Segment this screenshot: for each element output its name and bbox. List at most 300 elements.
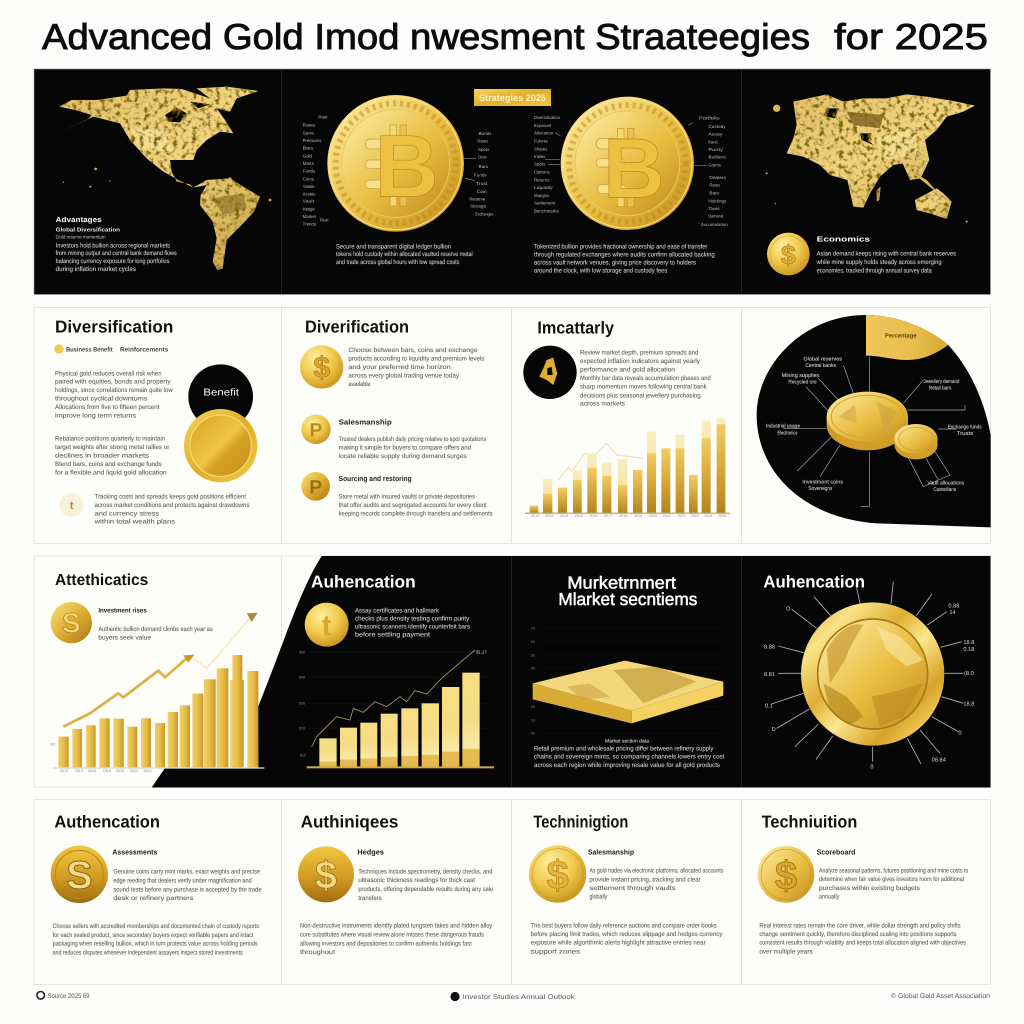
text block: caption: across each region while improving resale value for all gold products (534, 762, 720, 769)
text block: support zones (531, 948, 580, 955)
text block: ultrasonic thickness readings for thick cast (358, 877, 475, 884)
panel: Techniuition (758, 812, 968, 955)
text block: coin caption: Secure and transparent digital ledger bullion (336, 243, 451, 250)
diagram labels: Jewellery demand (923, 379, 959, 384)
text block: before placing limit trades, which reduces slippage and hedges currency (531, 931, 722, 938)
labels: coin left: Diversification (534, 115, 560, 120)
map: island specks (63, 168, 271, 201)
spoke labels: 08.84 (932, 756, 946, 763)
labels: coin right (688, 116, 728, 227)
bar chart: 2020 (116, 769, 124, 773)
labels: coin left: Bars (303, 146, 314, 151)
icon: coin: $ (315, 853, 337, 897)
bar chart: $0 (51, 742, 55, 746)
labels: coin right: Spots (478, 147, 489, 152)
spoke labels: 0 (958, 729, 961, 736)
icon: coin three (301, 472, 330, 501)
coin: small (894, 424, 938, 459)
labels: coin right: Bars (709, 190, 720, 195)
labels: coin right: Dealers (709, 175, 726, 180)
diagram labels: Electronics (777, 430, 797, 436)
labels: coin left: Coins (303, 176, 314, 181)
bar chart: $10 (300, 753, 306, 757)
icon: coin two: P (310, 419, 322, 441)
text block: coin caption (534, 243, 715, 274)
bar chart: 2024 (704, 514, 712, 518)
spoke labels: 8.81 (764, 671, 775, 677)
bar chart: 2018 (619, 514, 627, 518)
spoke labels: 18.8 (963, 639, 974, 645)
labels: coin left: Spots (534, 162, 546, 167)
labels: coin left: Exposure (534, 123, 551, 128)
labels: coin left: Vault (303, 199, 314, 204)
icon: pale round badge: t (70, 499, 74, 512)
spoke labels: 0.18 (963, 646, 974, 652)
labels: coin right: Coin (477, 189, 487, 194)
text block: coin one: Choose between bars, coins and exchange (348, 347, 478, 354)
heading: Authencation (54, 812, 160, 832)
spoke labels: 0.1 (765, 702, 773, 709)
text block: for each sealed product, since secondary buyers expect verifiable papers and intact (53, 932, 254, 939)
labels: coin right: Storage (470, 204, 486, 209)
icon: coin one: $ (313, 351, 330, 384)
diagram labels (766, 356, 982, 492)
text block: coin two: locate reliable supply during demand surges (339, 453, 467, 460)
text block (98, 607, 213, 641)
text block: Advantages: Investors hold bullion across regional markets (56, 242, 170, 249)
labels: coin left: Rate (318, 115, 327, 120)
labels: coin left: Benchmarks (534, 208, 559, 213)
spoke labels: (8.0 (964, 670, 974, 676)
text block: throughout (300, 949, 335, 956)
diagram labels: Global reserves (803, 356, 842, 362)
text block: paragraph three: and currency stress (95, 510, 159, 517)
text block: packaging when reselling bullion, which in turn protects value across holding periods (53, 940, 258, 947)
bar chart: $30 (299, 702, 305, 706)
text block: transfers (358, 895, 382, 902)
text block: Techniques include spectrometry, density checks, and (358, 868, 492, 875)
bar chart: 2022 (677, 514, 685, 518)
text block: paragraph three: within total wealth plans (94, 518, 175, 525)
text block: Advantages: Advantages (56, 215, 102, 224)
text block: Real interest rates remain the core driver, while dollar strength and policy shifts (759, 922, 961, 929)
labels: coin left: Market (303, 214, 316, 219)
text block: Economics (816, 235, 956, 274)
badge: Benefit circle: Benefit (203, 387, 239, 398)
coin: bitcoin: B (603, 121, 665, 216)
row 1: dark map and coin panels (34, 69, 990, 294)
heading: Mlarket secntiems (558, 590, 697, 609)
labels: coin left: Gold (303, 153, 312, 158)
bar chart: 2023 (691, 514, 699, 518)
chart grid: 00 (531, 732, 535, 736)
bar chart: 2018 (103, 769, 111, 773)
text block: coin two: making it simple for buyers to compare offers and (339, 444, 471, 451)
icon: coin (298, 846, 354, 902)
bar chart: 2014 (75, 769, 83, 773)
text block: description: across markets (580, 400, 625, 407)
icon: coin two (301, 415, 331, 444)
text block (300, 848, 493, 956)
text block: exposure while algorithmic alerts highlight attractive entries near (531, 939, 706, 946)
text block: coin one: and your preferred time horizon (348, 364, 451, 371)
heading: Attethicatics (55, 571, 148, 589)
labels: coin left: Shares (534, 146, 547, 151)
black rounded shape (757, 315, 991, 527)
bar chart: 2015 (575, 514, 583, 518)
chart grid: 40 (531, 667, 535, 671)
labels: coin left: Funds (303, 169, 316, 174)
text block: Assessments (112, 848, 157, 856)
text block: coin three: that offer audits and segregated accounts for every client (339, 502, 487, 509)
text block: allowing investors and depositories to confirm authentic holdings fast (300, 940, 472, 947)
icon: coin (51, 846, 108, 903)
text block: Salesmanship (588, 848, 634, 856)
text block: annually (819, 893, 839, 900)
footer: left source (37, 992, 90, 1000)
coin: bitcoin: B (375, 117, 439, 215)
labels: coin left: Rates (303, 123, 316, 128)
bar chart: 2012 (60, 769, 68, 773)
text block: globally (589, 893, 607, 900)
text block: caption: Market section data (605, 738, 649, 744)
labels: coin left: Assets (303, 192, 315, 197)
diagram labels: Investment coins (802, 479, 843, 485)
icon: coin one (300, 345, 343, 389)
text block: Hedges (357, 848, 384, 856)
chart grid: 50 (531, 653, 535, 657)
labels: coin left: Yields (303, 184, 315, 189)
icon: coin (758, 846, 814, 903)
text block: and reduces disputes whenever independent assayers inspect stored investments (53, 949, 243, 956)
text block: Advantages: Gold reserve momentum (56, 234, 106, 240)
chart grid (531, 627, 723, 736)
panel: Auhencation big coin (763, 572, 974, 770)
text block: description: decisions plus seasonal jewellery purchasing (580, 392, 701, 399)
icon: coin: S (62, 607, 81, 639)
text block: Economics: while mine supply holds steady across emerging (816, 259, 942, 266)
panel: Diversification with benefit coin (54, 317, 257, 525)
heading: Auhencation (311, 572, 416, 592)
text block: coin one: across every global trading venue today (348, 372, 459, 379)
labels: coin left: Liquidity (534, 185, 553, 190)
text block: paragraph two: target weights after strong metal rallies or (55, 444, 170, 451)
coin: large (827, 392, 908, 450)
footer: center source (450, 992, 575, 1001)
heading: Auhencation (763, 572, 865, 592)
text block: Assay certificates and hallmark (355, 607, 439, 614)
text block: settlement through vaults (589, 885, 676, 892)
panel: coin diagram on black shape (757, 315, 991, 527)
diagram labels: Sovereigns (808, 486, 832, 491)
footer: center source: Investor Studies Annual Outlook (463, 994, 575, 1001)
labels: coin right: Portfolio (699, 116, 720, 121)
text block: purchases within existing budgets (819, 885, 920, 892)
text block: caption: Retail premium and wholesale pricing differ between refinery supply (534, 745, 713, 752)
spoke labels: 18.8 (963, 701, 974, 707)
gold wedge with label: Percentage (885, 332, 917, 339)
tag: gold label: Strategies 2025 (479, 93, 547, 104)
text block: paragraph three: Tracking costs and spreads keeps gold positions efficient (95, 493, 246, 500)
labels: coin left: Options (534, 170, 550, 175)
text block: coin caption: Tokenized bullion provides fractional ownership and ease of transfer (534, 243, 708, 250)
panel: gold bitcoin coin two (534, 94, 975, 275)
labels: coin right: Rates (477, 139, 488, 144)
icon: coin: $ (775, 853, 797, 898)
icon: coin: t (322, 609, 332, 642)
text block (355, 607, 470, 638)
text block: paragraph one: improve long term returns (55, 412, 136, 419)
text block: paragraph two: Rebalance positions quarterly to maintain (55, 435, 165, 442)
bar chart: 2013 (545, 514, 553, 518)
chart grid: 60 (531, 640, 535, 644)
subheading with bullet: Business Benefit (66, 346, 113, 353)
leader lines (783, 357, 965, 507)
text block: description: performance and gold allocation (580, 366, 675, 373)
text block: description: Review market depth, premium spreads and (580, 349, 698, 356)
bar chart: 2016 (88, 769, 96, 773)
text block: Advantages: during inflation market cycles (56, 266, 136, 273)
text block: caption: chains and sovereign mints, so comparing channels lowers entry cost (534, 753, 725, 760)
bar chart: 2012 (531, 514, 539, 518)
icon: pale round badge (60, 493, 84, 517)
text block: over multiple years (759, 948, 813, 955)
icon: coin (529, 845, 586, 903)
text block: change sentiment quickly, therefore disciplined scaling into positions supports (759, 931, 957, 938)
diagram labels: Vault allocations (927, 480, 964, 486)
icon: plain gold coin (184, 409, 257, 482)
text block: checks plus density testing confirm purity (355, 615, 469, 622)
heading: Diverification (305, 317, 409, 336)
spoke labels: 8.88 (764, 643, 775, 650)
text block: paragraph one (55, 370, 173, 419)
icon: small coin (767, 233, 810, 275)
labels: coin right: Bars (479, 164, 488, 169)
labels: coin left: Hedge (303, 206, 315, 211)
text block: As gold trades via electronic platforms, allocated accounts (589, 867, 723, 874)
labels: coin left: Spots (303, 130, 314, 135)
diagram labels: Central banks (805, 363, 836, 368)
row 4: light panels (34, 799, 990, 984)
labels: coin left: Premiums (303, 138, 321, 143)
labels: coin left: Risk (320, 217, 329, 222)
text block: coin one: products according to liquidity and premium levels (348, 355, 484, 362)
text block: paragraph two: for a flexible and liquid gold allocation (55, 469, 167, 476)
heading: Authiniqees (301, 812, 398, 832)
text block: Investment rises (98, 607, 147, 614)
labels: coin right: Accumulation (701, 222, 728, 227)
heading: Murketrnmert (567, 573, 676, 592)
badge: Benefit circle (188, 364, 253, 429)
text block: edge reeding that dealers verify under magnification and (113, 877, 252, 884)
bar chart: $20 (299, 727, 305, 731)
bar chart (525, 418, 730, 518)
panel: Attethicatics rising bars (51, 571, 264, 773)
gold wedge with label (866, 315, 948, 360)
labels: coin right: Holdings (708, 198, 727, 203)
text block: coin caption: across vault network venues, giving price discovery to holders (534, 259, 696, 266)
labels: coin left: Returns (534, 177, 549, 182)
text block: coin two: Trusted dealers publish daily pricing relative to spot quotations (339, 436, 486, 443)
text block: paragraph one: paired with equities, bonds and property (55, 378, 171, 385)
text block: Genuine coins carry mint marks, exact weights and precise (113, 868, 260, 875)
text block: paragraph three: across market conditions and protects against drawdowns (95, 502, 249, 509)
labels: coin right: Karat (708, 139, 718, 144)
labels: coin left (303, 115, 329, 227)
labels: coin right: Exchanges (475, 212, 493, 217)
diagram labels: Trusts (957, 431, 973, 436)
map: North and South America (57, 87, 260, 270)
labels: coin right: Custody (708, 124, 726, 129)
labels: coin right: Assay (708, 132, 723, 137)
bar chart: 2019 (634, 514, 642, 518)
icon: black circle with gold nugget (523, 346, 577, 399)
heading (558, 573, 697, 609)
labels: coin right (463, 131, 493, 217)
panel: gold bitcoin coin one (303, 95, 493, 266)
bar chart: 2024 (143, 769, 151, 773)
text block: determine when fair value gives investors room for additional (819, 876, 964, 883)
labels: coin left: Index (534, 154, 546, 159)
illustration: gold bar (533, 661, 723, 723)
coin: globe (801, 602, 944, 746)
labels: coin right: Demand (708, 214, 723, 219)
diagram labels: Industrial usage (766, 423, 800, 429)
icon: small coin: $ (781, 240, 796, 270)
labels: coin right: Reserve (469, 197, 485, 202)
spoke labels (764, 602, 974, 770)
text block: Economics: economies, tracked through annual survey data (817, 267, 932, 274)
bar chart: 2016 (589, 514, 597, 518)
row 3: light and dark split backdrop (34, 556, 990, 788)
labels: coin right: Taxes (708, 206, 720, 211)
text block: coin three: Sourcing and restoring (339, 474, 412, 483)
row 2: light panels (34, 307, 990, 544)
text block: The best buyers follow daily reference auctions and compare order books (531, 922, 717, 929)
bar chart: $50 (299, 650, 305, 654)
text block: consistent results through volatility and keeps total allocation aligned with objectives (759, 939, 966, 946)
labels: coin right: Purity (708, 147, 723, 152)
panel: Authencation (51, 812, 262, 956)
labels: coin left: Mints (303, 161, 314, 166)
bar chart: 2017 (604, 514, 612, 518)
text block: coin one: available (348, 381, 371, 388)
text block: paragraph two (55, 435, 170, 476)
text block: paragraph two: declines in broader markets (55, 452, 149, 459)
heading: Techniuition (762, 812, 857, 832)
title: for 2025 (834, 16, 988, 57)
text block: Advantages: balancing currency exposure for long portfolios (56, 258, 169, 265)
text block: Non-destructive instruments identify plated tungsten fakes and hidden alloy (300, 922, 492, 929)
bar chart (299, 649, 494, 768)
text block (53, 848, 262, 956)
text block: coin caption: and trade across global hours with low spread costs (336, 259, 459, 266)
spoke labels: 14 (949, 609, 956, 615)
panel: Imcattarly bar chart (523, 318, 730, 518)
spoke labels: O (786, 606, 790, 612)
text block (531, 848, 723, 955)
bar chart (51, 655, 264, 773)
diagram labels: Recycled ore (788, 379, 817, 385)
labels: coin right: Grams (708, 163, 721, 168)
spoke labels: 0 (870, 763, 873, 770)
bar chart: 2021 (663, 514, 671, 518)
text block (759, 848, 968, 955)
text block: paragraph one: Allocations from five to fifteen percent (55, 404, 160, 411)
subheading with bullet (54, 344, 168, 354)
panel: Auhencation dark bars (299, 572, 494, 768)
title: Advanced Gold Imod nwesment Straateegies (42, 16, 810, 57)
text block: coin one (348, 347, 484, 388)
text block: Advantages (56, 215, 177, 273)
text block: description: expected inflation indicators against yearly (580, 358, 700, 365)
text block: coin three: Store metal with insured vaults or private depositories (339, 493, 475, 500)
labels: coin right: Funds (474, 172, 487, 177)
diagram labels: Exchange funds (948, 424, 982, 430)
text block: description: Monthly bar data reveals accumulation phases and (580, 375, 711, 382)
tag: gold label (474, 89, 551, 106)
text block: coin caption: tokens hold custody within allocated vaulted reserve metal (336, 251, 473, 258)
text block: Choose sellers with accredited memberships and documented chain of custody reports (53, 923, 259, 930)
heading: Imcattarly (537, 318, 614, 337)
coin: bitcoin (327, 95, 464, 232)
text block: Authentic bullion demand climbs each year as (98, 626, 213, 633)
text block: description (580, 349, 711, 407)
text block: coin three: keeping records complete through transfers and settlements (339, 510, 493, 517)
panel: Techninigtion (529, 812, 723, 955)
text block: coin two (339, 418, 486, 460)
text block: sound tests before any purchase is accepted by the trade (113, 886, 262, 893)
labels: coin left: Margins (534, 193, 549, 198)
text block: coin three (339, 474, 493, 517)
spoke labels: 0.88 (948, 602, 959, 609)
labels: coin right: Bullions (708, 155, 726, 160)
text block: coin caption: around the clock, with low storage and custody fees (534, 267, 667, 274)
bar chart: 2020 (649, 514, 657, 518)
icon: coin (305, 603, 349, 647)
text block: core substitutes where visual review alone misses these dangerous frauds (300, 931, 484, 938)
spoke labels: D (772, 726, 776, 732)
panel: Americas map (56, 87, 271, 273)
coin: bitcoin (561, 97, 694, 230)
footer: copyright: © Global Gold Asset Association (891, 993, 990, 1000)
icon: coin: $ (547, 852, 569, 897)
text block: Economics: Asian demand keeps rising with central bank reserves (817, 250, 956, 257)
bar chart: $40 (299, 675, 305, 679)
labels: coin left: Futures (534, 138, 548, 143)
labels: coin left: Trends (303, 222, 316, 227)
diagram labels: Mining supplies (782, 373, 819, 378)
bar chart: $1,27 (476, 649, 487, 654)
icon: coin (51, 602, 92, 643)
text block: Analyze seasonal patterns, futures positioning and mine costs to (819, 867, 968, 874)
text block: coin caption: through regulated exchanges where audits confirm allocated backing (534, 251, 715, 258)
subheading with bullet: Reinforcements (120, 346, 168, 353)
spokes (772, 582, 963, 764)
text block: paragraph one: throughout cyclical downturns (55, 395, 147, 402)
arrow: pale trend (193, 613, 258, 668)
icon: coin: S (66, 853, 92, 897)
panel: Market sections gold bar (531, 573, 725, 769)
text block: ultrasonic scanners identify counterfeit bars (355, 623, 470, 630)
text block: Advantages: from mining output and central bank demand flows (56, 250, 177, 257)
footer: left source: Source 2025 69 (48, 993, 90, 1000)
text block: before settling payment (355, 631, 430, 638)
labels: coin left: Allocation (534, 131, 553, 136)
text block: coin two: Salesmanship (339, 418, 392, 426)
map: Europe Asia Africa Australia (787, 94, 975, 219)
text block: Advantages: Global Diversification (56, 226, 120, 233)
